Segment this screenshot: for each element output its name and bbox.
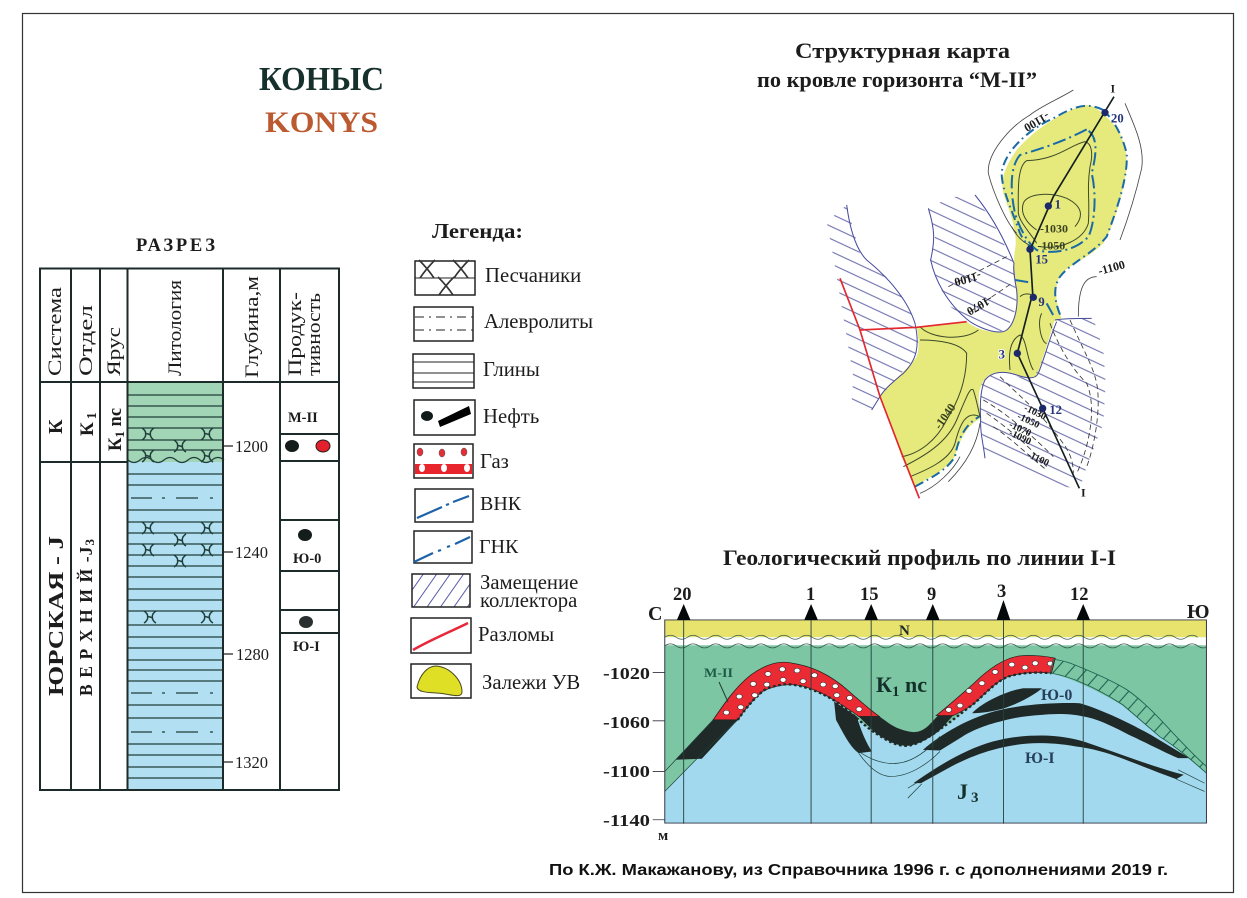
map title bbox=[757, 38, 1037, 92]
legend: gas-oil contact bbox=[414, 531, 519, 563]
depth axis labels: -1020 bbox=[603, 664, 650, 683]
hydrocarbon deposit bbox=[880, 105, 1127, 487]
layer labels: 1 bbox=[892, 684, 899, 700]
Neogene band bbox=[665, 620, 1206, 637]
well numbers: 20 bbox=[1111, 111, 1124, 125]
profile drawing bbox=[653, 600, 1220, 824]
map title: по кровле горизонта “М-II” bbox=[757, 67, 1037, 92]
well labels: 15 bbox=[860, 585, 878, 605]
system and series labels: ЮРСКАЯ - J bbox=[44, 536, 68, 696]
layer labels: К bbox=[876, 672, 892, 697]
layer labels: Ю-I bbox=[1025, 750, 1055, 767]
contour labels: -1030 bbox=[1022, 403, 1048, 423]
depth axis labels: -1100 bbox=[603, 762, 650, 781]
table grid bbox=[40, 268, 339, 790]
productivity column bbox=[285, 410, 330, 655]
heading: section: РАЗРЕЗ bbox=[136, 236, 215, 256]
panel: stratigraphic section bbox=[40, 236, 339, 790]
map title: Структурная карта bbox=[795, 38, 1010, 63]
contour labels: -1070 bbox=[1007, 419, 1033, 439]
profile frame and ticks bbox=[653, 620, 1206, 823]
legend: siltstone bbox=[414, 307, 593, 341]
outer contours bbox=[920, 90, 1142, 493]
column headers: Глубина,м bbox=[243, 276, 263, 378]
legend heading: Легенда: bbox=[432, 219, 523, 243]
oil-water and gas contacts bbox=[915, 106, 1127, 487]
layer labels: nc bbox=[899, 672, 927, 697]
contour labels: -1050 bbox=[1015, 411, 1041, 431]
depth axis labels: -1060 bbox=[603, 713, 650, 732]
contour labels: -1030 bbox=[1040, 222, 1068, 236]
productivity column: Ю-0 bbox=[293, 551, 321, 567]
legend: hydrocarbon deposits bbox=[411, 664, 580, 698]
legend: faults: Разломы bbox=[478, 624, 554, 646]
system and series labels: 1 bbox=[85, 412, 100, 419]
well numbers: 3 bbox=[999, 347, 1005, 361]
legend: hydrocarbon deposits: Залежи УВ bbox=[482, 672, 580, 694]
system and series labels: К bbox=[106, 438, 126, 451]
legend: gas: Газ bbox=[480, 451, 509, 473]
productivity column: М-II bbox=[288, 410, 318, 426]
contour labels: -1090 bbox=[1007, 428, 1033, 448]
layer labels bbox=[704, 623, 1072, 806]
column headers: Система bbox=[46, 287, 66, 376]
panel: legend bbox=[411, 219, 593, 698]
gas bubbles bbox=[723, 661, 1053, 715]
legend: oil bbox=[414, 400, 539, 435]
legend: sandstone bbox=[415, 260, 581, 295]
fault lines bbox=[840, 278, 967, 498]
well lines bbox=[684, 620, 1083, 824]
layer labels: Ю-0 bbox=[1041, 687, 1072, 704]
legend: oil: Нефть bbox=[483, 406, 539, 428]
column headers: Отдел bbox=[77, 305, 97, 376]
well numbers: 9 bbox=[1038, 295, 1045, 309]
depth scale: 1280 bbox=[236, 645, 269, 664]
well numbers: 15 bbox=[1035, 252, 1048, 266]
contour labels: -1100 bbox=[1022, 109, 1052, 135]
panel: structure map bbox=[757, 38, 1142, 500]
map drawing bbox=[827, 84, 1142, 500]
system and series labels: К bbox=[77, 422, 98, 436]
system and series labels: 3 bbox=[82, 538, 97, 546]
column headers: тивность bbox=[305, 293, 325, 376]
legend: gas-oil contact: ГНК bbox=[479, 536, 519, 558]
depth axis labels: м bbox=[658, 828, 668, 844]
depth scale: 1240 bbox=[235, 543, 268, 562]
compass labels: Ю bbox=[1187, 601, 1210, 623]
subtitle: Konys: KONYS bbox=[265, 106, 378, 139]
source note: По К.Ж. Макажанову, из Справочника 1996 г. с дополнениями 2019 г. bbox=[549, 862, 1168, 879]
legend: reservoir replacement bbox=[412, 572, 578, 612]
well labels: 12 bbox=[1070, 585, 1088, 605]
replaced reservoir hatching bbox=[1050, 659, 1206, 773]
legend: reservoir replacement: коллектора bbox=[480, 590, 577, 612]
legend: clay bbox=[413, 354, 540, 388]
contour labels bbox=[931, 109, 1126, 469]
layer labels: J bbox=[957, 779, 968, 804]
profile heading: Геологический профиль по линии I-I bbox=[723, 545, 1116, 570]
layer labels: N bbox=[899, 623, 910, 639]
well numbers: 1 bbox=[1055, 197, 1061, 211]
dashed contours bbox=[948, 257, 1098, 473]
layer lines bbox=[665, 720, 1205, 798]
map drawing: I bbox=[1081, 486, 1086, 500]
hatched zones bbox=[827, 195, 1106, 488]
panel: geological profile bbox=[603, 545, 1220, 844]
well labels: 9 bbox=[927, 585, 936, 605]
title: Коныс: КОНЫС bbox=[259, 61, 384, 98]
compass labels bbox=[648, 601, 1210, 625]
productivity column: Ю-I bbox=[293, 639, 320, 655]
Jurassic background bbox=[665, 620, 1206, 823]
legend: water-oil contact: ВНК bbox=[480, 493, 522, 515]
well labels: 20 bbox=[673, 585, 692, 605]
section line I-I bbox=[1017, 97, 1114, 488]
contour labels: -1050 bbox=[1037, 238, 1065, 252]
line end marks: I bbox=[1111, 84, 1116, 96]
legend: reservoir replacement: Замещение bbox=[480, 572, 578, 594]
legend: sandstone: Песчаники bbox=[485, 265, 581, 287]
contour labels: -1100 bbox=[953, 269, 983, 289]
scalloped oil edge bbox=[738, 673, 1051, 746]
wells bbox=[1014, 109, 1109, 412]
depth axis labels: -1140 bbox=[603, 811, 650, 830]
well labels bbox=[673, 582, 1088, 605]
column headers: Ярус bbox=[105, 327, 125, 376]
depth axis labels bbox=[603, 664, 668, 844]
layer labels: 3 bbox=[971, 790, 978, 806]
depth scale: 1320 bbox=[235, 753, 268, 772]
legend: water-oil contact bbox=[415, 489, 522, 522]
system and series labels: 1 bbox=[112, 431, 127, 438]
well triangles bbox=[677, 600, 1090, 620]
contour labels: -1100 bbox=[1096, 257, 1126, 278]
Cretaceous green layer bbox=[665, 645, 1206, 791]
column headers bbox=[46, 276, 325, 378]
system and series labels bbox=[44, 408, 127, 696]
layer labels: М-II bbox=[704, 665, 733, 680]
lithology column bbox=[128, 382, 224, 790]
well labels: 3 bbox=[997, 582, 1006, 602]
column headers: Литология bbox=[166, 279, 186, 376]
legend: faults bbox=[411, 618, 554, 653]
legend: siltstone: Алевролиты bbox=[484, 311, 593, 333]
legend: gas bbox=[414, 444, 509, 478]
well numbers: 12 bbox=[1049, 403, 1062, 417]
system and series labels: nc bbox=[106, 408, 126, 431]
contour labels: -1100 bbox=[1025, 449, 1051, 469]
system and series labels: К bbox=[45, 419, 67, 434]
depth scale: 1200 bbox=[235, 437, 268, 456]
oil bodies bbox=[675, 688, 1189, 783]
column headers: Продук- bbox=[286, 292, 306, 376]
well labels: 1 bbox=[806, 585, 815, 605]
depth scale bbox=[223, 437, 269, 772]
system and series labels: В Е Р Х Н И Й -J bbox=[76, 547, 96, 696]
contour labels: -1070 bbox=[964, 292, 995, 319]
contours bbox=[902, 142, 1092, 477]
well numbers bbox=[999, 111, 1124, 417]
compass labels: С bbox=[648, 603, 662, 625]
gas caps bbox=[713, 656, 1055, 720]
contour labels: -1040 bbox=[931, 401, 958, 432]
legend: clay: Глины bbox=[483, 359, 540, 381]
